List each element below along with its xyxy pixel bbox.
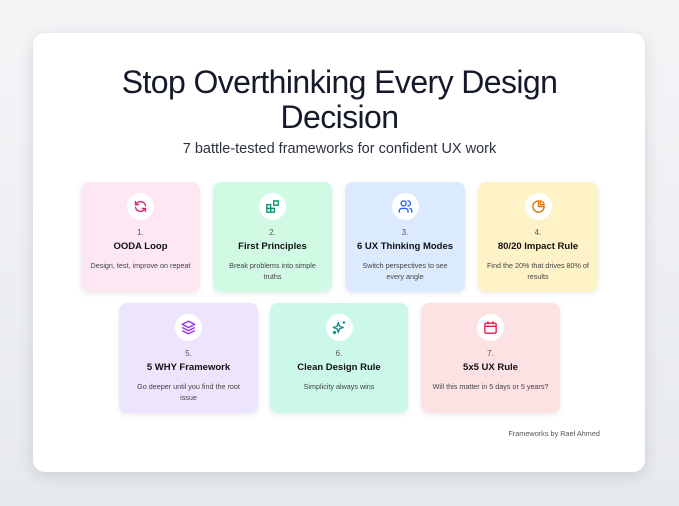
- card 7: [421, 303, 560, 413]
- card 5: 5.: [185, 349, 192, 358]
- icon: users: [392, 193, 418, 220]
- card 5: 5 WHY Framework: [147, 362, 230, 373]
- card 6: 6.: [336, 349, 342, 358]
- subtitle: 7 battle-tested frameworks for confident UX work: [183, 141, 496, 157]
- card 7: 7.: [487, 349, 494, 358]
- card 4: Find the 20% that drives 80% of results: [487, 261, 589, 281]
- icon: refresh: [127, 193, 154, 220]
- title: Stop Overthinking Every Design: [122, 64, 557, 100]
- icon: sparkles: [326, 314, 352, 341]
- card 7: 5x5 UX Rule: [463, 362, 518, 373]
- card 3: Switch perspectives to see every angle: [362, 261, 448, 281]
- card 2: First Principles: [238, 241, 307, 252]
- icon: calendar: [477, 314, 504, 341]
- card 5: [119, 303, 258, 413]
- card 7: Will this matter in 5 days or 5 years?: [433, 382, 548, 391]
- card 3: 6 UX Thinking Modes: [357, 241, 453, 252]
- main card: [33, 33, 645, 472]
- card 3: [345, 182, 465, 292]
- icon: pie: [524, 193, 552, 220]
- card 2: Break problems into simple truths: [229, 261, 316, 281]
- card 1: 1.: [137, 228, 144, 237]
- card 1: OODA Loop: [114, 241, 168, 252]
- card 1: Design, test, improve on repeat: [91, 261, 190, 270]
- card 5: Go deeper until you find the root issue: [137, 382, 240, 402]
- icon: blocks: [259, 193, 286, 220]
- card 2: 2.: [269, 228, 276, 237]
- title: Decision: [281, 99, 398, 135]
- card 6: Clean Design Rule: [297, 362, 381, 373]
- card 1: [81, 182, 200, 292]
- icon: layers: [175, 314, 202, 341]
- card 6: [270, 303, 408, 413]
- footer credit: Frameworks by Rael Ahmed: [508, 429, 600, 438]
- card 4: 80/20 Impact Rule: [498, 241, 578, 252]
- card 6: Simplicity always wins: [304, 382, 374, 391]
- title: [122, 64, 557, 135]
- card 2: [213, 182, 332, 292]
- card 3: 3.: [402, 228, 408, 237]
- card 4: [478, 182, 598, 292]
- card 4: 4.: [535, 228, 541, 237]
